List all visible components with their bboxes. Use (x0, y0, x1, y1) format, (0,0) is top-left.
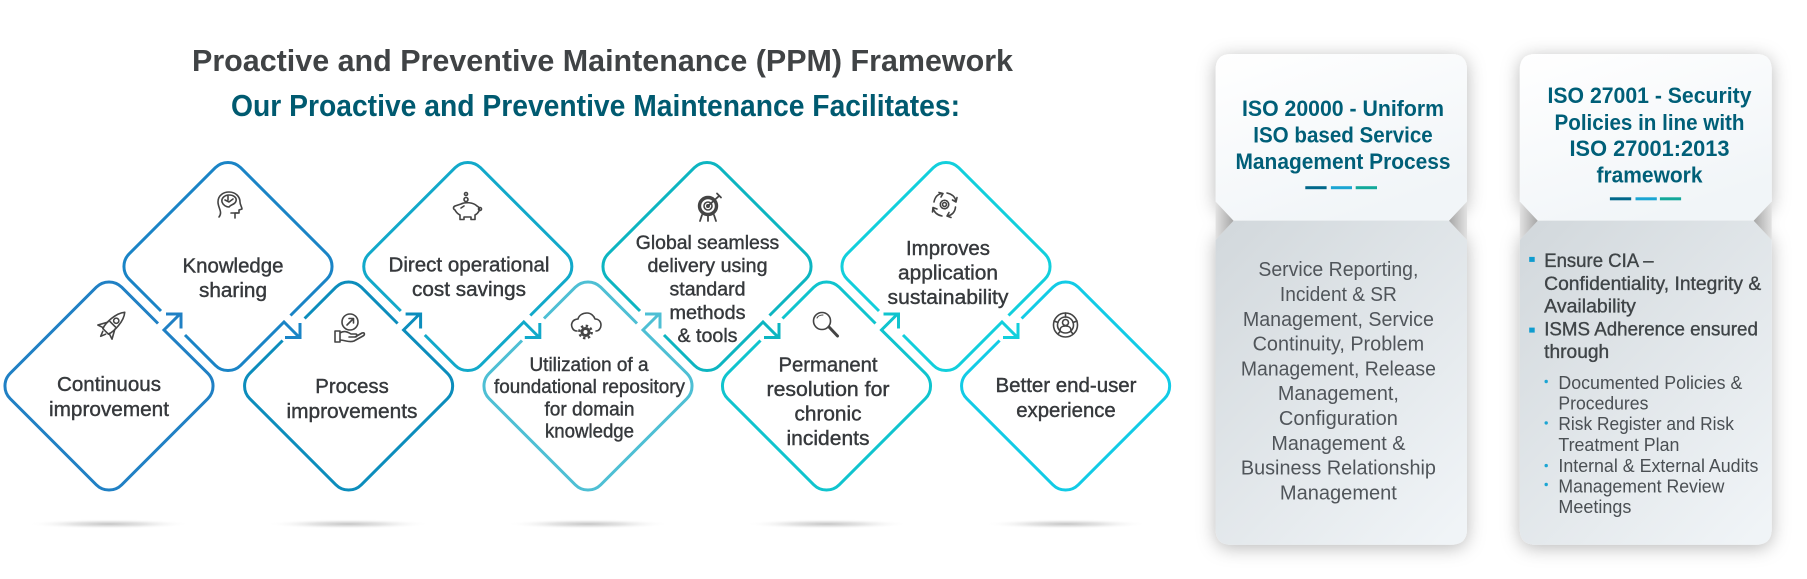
body text: Management, (1278, 383, 1399, 405)
label (996, 374, 1137, 422)
icon: user in ring (1054, 313, 1078, 337)
heading: Management Process (1236, 149, 1450, 174)
panel background (1216, 54, 1467, 545)
label: improvement (49, 398, 169, 421)
label (494, 355, 685, 442)
step: Better end-user experience (962, 282, 1170, 490)
panel: ISO 27001 (1520, 54, 1772, 545)
label: application (898, 262, 998, 284)
body text: Incident & SR (1280, 284, 1397, 306)
panel background (1520, 54, 1772, 545)
label: for domain (544, 400, 634, 420)
label: Knowledge (182, 254, 284, 278)
step: Improves application sustainability (842, 162, 1050, 371)
label: sharing (199, 279, 267, 302)
icon: piggy bank (454, 192, 482, 220)
label (766, 354, 890, 450)
step: Global seamless delivery (603, 162, 811, 371)
label: improvements (286, 400, 418, 423)
ground shadows (27, 519, 1148, 529)
sub bullets: Management Review (1558, 476, 1725, 496)
icon: rocket (94, 305, 132, 343)
heading: framework (1596, 162, 1703, 187)
main bullets: Availability (1544, 297, 1636, 318)
label: resolution for (766, 378, 890, 401)
icon: target (700, 194, 721, 221)
step: Continuous improvement (5, 282, 213, 490)
label: Process (315, 375, 389, 398)
icon: cycle with gear (932, 192, 957, 218)
sub bullets: Internal & External Audits (1558, 456, 1758, 476)
subtitle: Our Proactive and Preventive Maintenance Facilitates: (231, 88, 960, 123)
label: methods (670, 302, 746, 324)
label: & tools (678, 325, 738, 347)
diamond outline (962, 282, 1170, 490)
heading: ISO 27001 - Security (1548, 83, 1752, 108)
step: Process improvements (245, 282, 453, 490)
body text: Business Relationship (1241, 458, 1436, 480)
heading (1236, 96, 1450, 174)
label: Permanent (778, 354, 878, 376)
panel: ISO 20000 (1216, 54, 1467, 545)
step: foundational repository (484, 282, 692, 490)
label: chronic (794, 402, 862, 426)
diamond outline with arrow (124, 162, 332, 371)
sub bullets: Treatment Plan (1558, 435, 1679, 455)
sub bullets: Risk Register and Risk (1558, 414, 1735, 434)
main bullets: ISMS Adherence ensured (1544, 319, 1758, 340)
body text: Management & (1271, 433, 1406, 455)
diamond outline with arrow (364, 162, 572, 371)
body text: Management (1280, 482, 1397, 504)
body text: Management, Service (1243, 309, 1434, 331)
label (49, 373, 169, 421)
label: standard (670, 278, 746, 300)
label: Continuous (57, 373, 161, 396)
diamond outline with arrow (245, 282, 453, 490)
label: Direct operational (388, 254, 550, 276)
diamond outline with arrow (484, 282, 692, 490)
icon: magnifier (814, 312, 838, 336)
label: sustainability (888, 286, 1009, 309)
icon: hand holding coin (335, 314, 364, 342)
main bullets: Confidentiality, Integrity & (1544, 274, 1762, 295)
step: Permanent resolution (722, 282, 931, 490)
label: delivery using (648, 255, 768, 277)
heading (1548, 83, 1752, 187)
label (182, 254, 284, 302)
title: Proactive and Preventive Maintenance (PPM) Framework (192, 43, 1014, 78)
notch shading (1216, 202, 1467, 240)
icon: head with brain (218, 192, 242, 218)
sub bullets: Procedures (1558, 394, 1648, 414)
body text: Management, Release (1241, 358, 1436, 380)
heading: ISO based Service (1253, 123, 1433, 148)
label: Better end-user (996, 374, 1137, 397)
body text: Configuration (1279, 408, 1398, 430)
accent dashes (1610, 197, 1681, 200)
diamond outline with arrow (5, 282, 213, 490)
label: Utilization of a (530, 355, 649, 376)
main bullets: through (1544, 342, 1609, 363)
body text: Service Reporting, (1258, 259, 1418, 281)
label: incidents (786, 427, 870, 450)
icon: cloud with gear (572, 313, 601, 338)
main bullets (1529, 251, 1762, 363)
heading: ISO 27001:2013 (1570, 136, 1730, 161)
label (636, 232, 779, 347)
body text (1241, 259, 1436, 504)
label: Improves (906, 237, 990, 260)
label (388, 254, 550, 301)
step: Knowledge sharing (124, 162, 332, 371)
label: cost savings (412, 278, 526, 301)
heading: Policies in line with (1554, 110, 1744, 135)
notch shading (1520, 202, 1772, 240)
body text: Continuity, Problem (1253, 334, 1424, 356)
diamond outline with arrow (842, 162, 1050, 371)
label: knowledge (545, 422, 634, 442)
label (888, 237, 1009, 309)
label: experience (1016, 399, 1116, 422)
label (286, 375, 418, 423)
main bullets: Ensure CIA – (1544, 251, 1654, 272)
heading: ISO 20000 - Uniform (1242, 96, 1444, 121)
accent dashes (1305, 186, 1377, 189)
diamond outline with arrow (603, 162, 811, 371)
sub bullets: Meetings (1558, 497, 1631, 517)
step: Direct operational cost savings (364, 162, 572, 371)
diamond outline with arrow (722, 282, 931, 490)
sub bullets (1544, 373, 1758, 517)
sub bullets: Documented Policies & (1558, 373, 1742, 393)
label: foundational repository (494, 377, 685, 398)
label: Global seamless (636, 232, 779, 254)
